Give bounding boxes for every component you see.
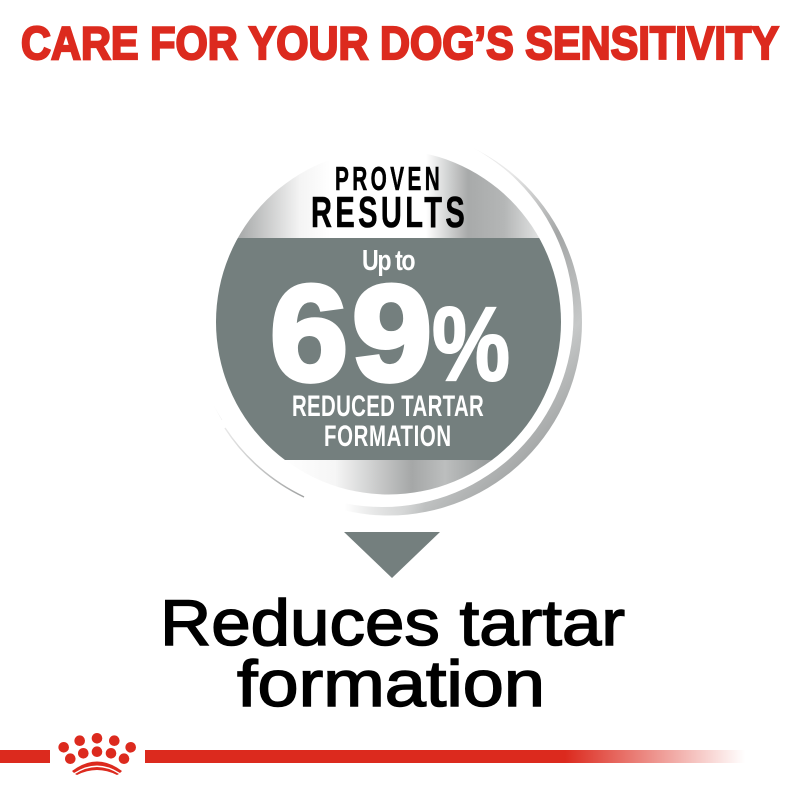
arrow pointing down bbox=[344, 532, 440, 578]
badge: proven results bbox=[216, 152, 582, 516]
line one: Reduces tartar bbox=[160, 586, 625, 659]
big number: 69%: % bbox=[432, 286, 510, 403]
footer bar: left bbox=[0, 750, 50, 763]
text: reduced tartar: REDUCED TARTAR bbox=[292, 390, 484, 423]
line two: formation bbox=[237, 647, 545, 720]
benefit statement bbox=[160, 586, 625, 720]
icon: royal crown logo bbox=[58, 733, 136, 775]
text: formation: FORMATION bbox=[324, 420, 451, 453]
big number: 69% bbox=[270, 257, 510, 409]
lower-left thin arc bbox=[225, 428, 304, 497]
big number: 69%: 9 bbox=[352, 257, 432, 409]
badge disc bbox=[210, 145, 570, 500]
crescent ring bbox=[192, 125, 582, 525]
heading: results: RESULTS bbox=[311, 187, 465, 236]
heading: proven: PROVEN bbox=[335, 160, 440, 197]
big number: 69%: 6 bbox=[270, 257, 348, 409]
text: up to: Up to bbox=[362, 243, 416, 277]
footer bar: right fading bbox=[145, 750, 745, 763]
